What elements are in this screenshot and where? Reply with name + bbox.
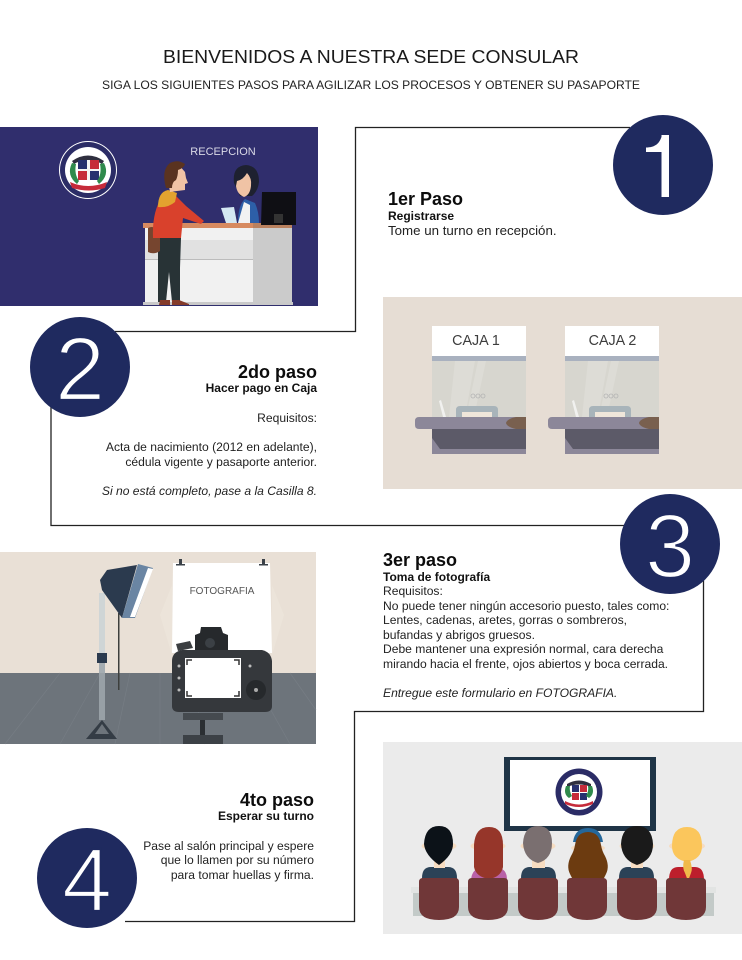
icon: consular seal [59,141,117,199]
step 3 number badge [620,494,720,597]
title: BIENVENIDOS A NUESTRA SEDE CONSULAR [163,47,579,67]
step 2 text: cédula vigente y pasaporte anterior. [125,455,317,469]
step 3 text: Toma de fotografía [383,570,490,584]
step 4 text: que lo llamen por su número [161,853,314,867]
icon: consular seal on screen [556,768,602,816]
step 2 text: Hacer pago en Caja [206,381,317,395]
step 3 text: Entregue este formulario en FOTOGRAFIA. [383,686,617,700]
step 3 text: Requisitos: [383,584,443,598]
connector line between steps [51,128,704,922]
label: caja 1: CAJA 1 [452,333,500,349]
computer monitor [261,192,296,225]
step 4 text: para tomar huellas y firma. [171,868,314,882]
step 3 text: mirando hacia el frente, ojos abiertos y boca cerrada. [383,657,668,671]
step 2 text: Requisitos: [257,411,317,425]
backdrop paper [160,559,284,655]
step 1 number badge [613,115,713,218]
step 3 text [383,550,669,700]
reception desk [143,223,293,305]
person 2 [470,827,507,880]
panel: reception illustration [0,127,318,306]
step 1 text: 1er Paso [388,189,463,209]
step 1 text: Registrarse [388,209,454,223]
cashier window 1 [415,326,526,454]
subtitle: SIGA LOS SIGUIENTES PASOS PARA AGILIZAR LOS PROCESOS Y OBTENER SU PASAPORTE [102,78,640,92]
studio light [86,564,153,739]
step 2 text: Acta de nacimiento (2012 en adelante), [106,440,317,454]
screen [504,757,656,831]
step 2 text: Si no está completo, pase a la Casilla 8. [102,484,317,498]
step 4 text: Pase al salón principal y espere [143,839,314,853]
step 4 number badge [37,828,137,931]
step 4 number badge: 4 [62,831,112,931]
panel: photography illustration [0,552,316,744]
customer [148,161,204,305]
step 3 text: Debe mantener una expresión normal, cara derecha [383,642,664,656]
panel: waiting room illustration [383,742,742,934]
step 3 text: bufandas y abrigos gruesos. [383,628,535,642]
step 1 text [388,189,557,238]
person 4 [568,828,608,880]
step 2 text: 2do paso [238,362,317,382]
step 3 text: No puede tener ningún accesorio puesto, tales como: [383,599,669,613]
step 2 text [102,362,317,498]
person 1 [422,826,457,882]
cashier window 2 [548,326,659,454]
camera [172,627,272,744]
receptionist [221,165,259,223]
label: reception sign: RECEPCION [190,146,256,158]
step 4 text: 4to paso [240,790,314,810]
step 3 text: 3er paso [383,550,457,570]
step 4 text: Esperar su turno [218,809,314,823]
step 1 number badge: 1 [637,118,687,218]
row of seats [419,878,706,920]
label: fotografia: FOTOGRAFIA [190,586,255,597]
panel: cashier illustration [383,297,742,489]
step 3 text: Lentes, cadenas, aretes, gorras o sombreros, [383,613,627,627]
label: caja 2: CAJA 2 [589,333,636,349]
step 3 number badge: 3 [645,497,695,597]
person 3 [520,826,556,882]
person 5 [619,826,654,882]
step 1 text: Tome un turno en recepción. [388,223,557,238]
step 4 text [143,790,314,882]
step 2 number badge [30,317,130,420]
step 2 number badge: 2 [55,320,105,420]
person 6 [669,827,705,881]
